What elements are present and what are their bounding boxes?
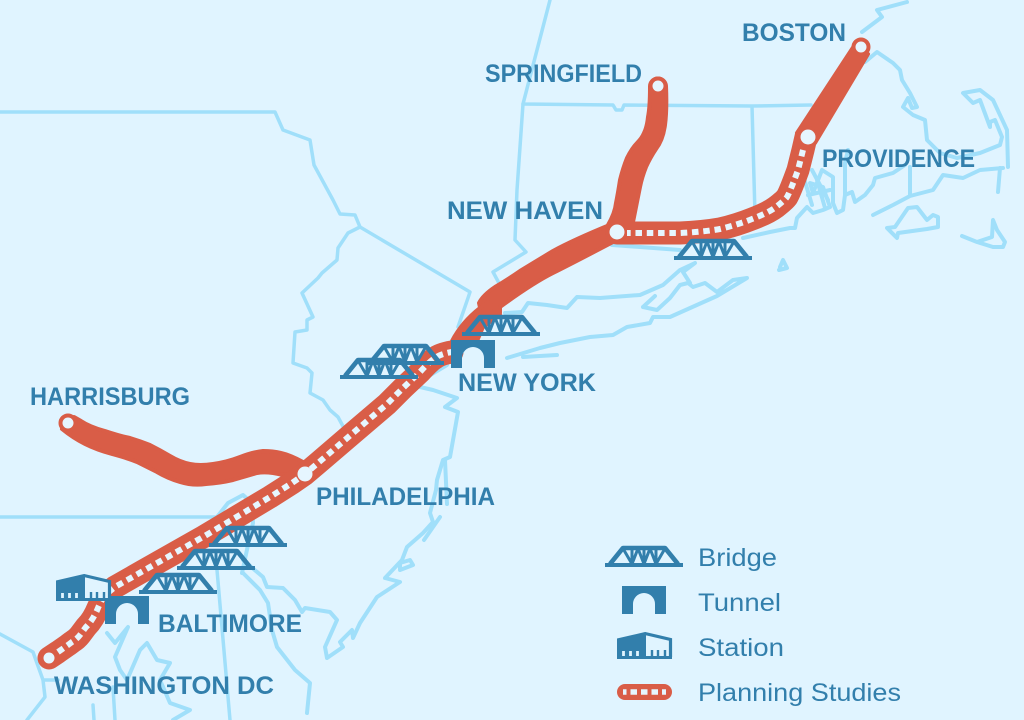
route: New York to Washington, planning studies (49, 352, 452, 658)
icon: station Baltimore (56, 574, 111, 601)
legend icon: planning studies (623, 684, 666, 700)
legend text: bridge: Bridge (698, 544, 777, 572)
label: New Haven: NEW HAVEN (447, 197, 603, 225)
label: Harrisburg: HARRISBURG (30, 383, 190, 411)
icon: bridge New York west upper (366, 346, 444, 365)
label: Boston: BOSTON (742, 19, 846, 47)
icon: bridge New York east (462, 317, 540, 336)
label: Baltimore: BALTIMORE (158, 610, 302, 638)
label: New York: NEW YORK (458, 369, 596, 397)
icon: bridge Baltimore lower (139, 575, 217, 594)
legend icon: station (617, 632, 672, 659)
label: Philadelphia: PHILADELPHIA (316, 483, 495, 511)
route: Harrisburg to Philadelphia (62, 417, 305, 485)
label: Washington DC: WASHINGTON DC (54, 672, 274, 700)
route: Boston to Providence (797, 46, 868, 143)
icon: bridge Baltimore upper (209, 528, 287, 547)
legend text: station: Station (698, 634, 784, 662)
legend text: tunnel: Tunnel (698, 589, 781, 617)
route: Springfield branch (608, 79, 666, 240)
icon: tunnel Baltimore (105, 596, 149, 624)
legend icon: bridge (605, 548, 683, 567)
icon: bridge Baltimore middle (177, 551, 255, 570)
route: New Haven to New York (479, 224, 615, 313)
label: Springfield: SPRINGFIELD (485, 60, 642, 88)
icon: bridge Connecticut (674, 241, 752, 260)
legend (605, 544, 901, 707)
route: New York approach (452, 302, 500, 341)
icon: bridge New York west lower (340, 360, 418, 379)
legend text: planning studies: Planning Studies (698, 679, 901, 707)
label: Providence: PROVIDENCE (822, 145, 975, 173)
route: Providence to New Haven, planning studies (617, 137, 806, 233)
legend icon: tunnel (622, 586, 666, 614)
icon: tunnel New York (451, 340, 495, 368)
station nodes (42, 40, 868, 666)
